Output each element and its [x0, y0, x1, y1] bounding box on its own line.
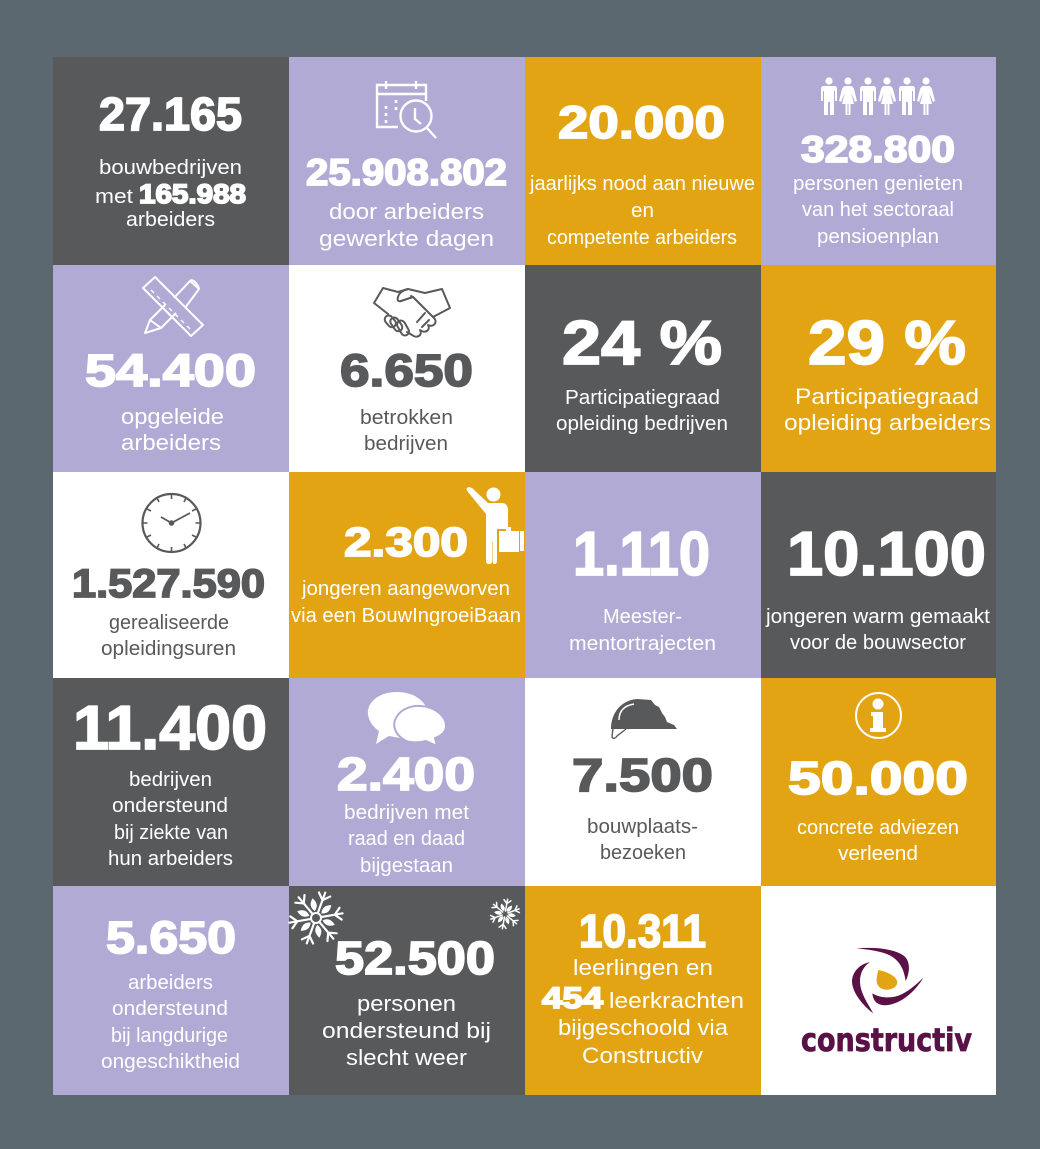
text: betrokken bedrijven: bedrijven — [364, 433, 448, 455]
number: 2.300: 2.300 — [344, 519, 468, 565]
text: door arbeiders gewerkte dagen: gewerkte dagen — [319, 226, 494, 251]
text: bedrijven ondersteund bij ziekte: bedrijven — [129, 769, 212, 791]
panel: 50.000 concrete adviezen — [761, 678, 996, 886]
text: opgeleide arbeiders — [121, 404, 224, 455]
text: meester-mentortrajecten — [569, 606, 716, 655]
number: 5.650: 5.650 — [106, 912, 236, 963]
icon: person with suitcase — [467, 487, 524, 564]
text: arbeiders ondersteund: arbeiders — [128, 972, 213, 994]
text: participatiegraad opleiding arbeiders: Participatiegraad — [795, 384, 979, 409]
text: jongeren warm gemaakt: jongeren warm gemaakt — [765, 606, 990, 628]
panel: 24 % participatiegraad bedrijven — [525, 265, 761, 472]
icon: hard hat — [611, 699, 677, 738]
panel: 1.527.590 opleidingsuren — [53, 472, 289, 678]
text: jongeren warm gemaakt — [765, 606, 990, 654]
text: bedrijven ondersteund bij ziekte — [108, 769, 233, 870]
number: 54.400: 54.400 — [85, 345, 256, 396]
panel: 5.650 langdurige ongeschiktheid — [53, 886, 289, 1095]
text: opgeleide arbeiders: opgeleide — [121, 404, 224, 429]
number: 7.500: 7.500 — [572, 749, 713, 801]
text: leerlingen en 454 leerkrachten: bijgeschoold via — [558, 1015, 729, 1040]
text: jaarlijks nood: competente arbeiders — [547, 227, 737, 249]
text: personen genieten — [793, 173, 963, 248]
text: betrokken bedrijven: betrokken — [360, 407, 453, 429]
text: personen ondersteund bij slecht weer — [322, 991, 491, 1070]
panel: 54.400 opgeleide arbeiders — [53, 265, 289, 472]
text: bouwbedrijven met 165.988 arbeiders — [95, 157, 246, 231]
text: leerlingen en 454 leerkrachten: leerlingen en — [573, 955, 713, 980]
logo wordmark: constructiv: constructiv — [801, 1021, 972, 1059]
panel: 29 % participatiegraad arbeiders — [761, 265, 996, 472]
number: 11.400: 11.400 — [73, 694, 267, 763]
text: participatiegraad opleiding arbeiders — [784, 384, 991, 435]
text: bouwbedrijven met 165.988 arbeiders: bouwbedrijven — [99, 157, 242, 179]
text: personen ondersteund bij slecht weer: personen — [357, 991, 456, 1016]
panel: 2.300 jongeren aangeworven — [289, 472, 525, 678]
text: concrete adviezen verleend: concrete adviezen — [797, 817, 959, 839]
icon: constructiv swirl — [852, 948, 923, 1013]
icon: clock — [142, 494, 200, 552]
text: gerealiseerde opleidingsuren: opleidingsuren — [101, 638, 236, 660]
panel: 328.800 pensioenplan — [761, 57, 996, 265]
panel: 25.908.802 gewerkte dagen — [289, 57, 525, 265]
number: 10.311: 10.311 — [579, 905, 706, 957]
text: leerlingen en 454 leerkrachten: 454 — [542, 982, 603, 1015]
number: 52.500: 52.500 — [335, 932, 495, 984]
text: leerlingen en 454 leerkrachten: Constructiv — [582, 1043, 703, 1068]
text: bedrijven met raad en daad: bijgestaan — [360, 855, 453, 877]
text: personen genieten: pensioenplan — [817, 226, 939, 248]
text: door arbeiders gewerkte dagen — [319, 199, 494, 251]
text: jongeren aangeworven: jongeren aangeworven — [301, 578, 510, 600]
icon: info circle — [856, 693, 901, 738]
panel: 7.500 bouwplaatsbezoeken — [525, 678, 761, 886]
text: bedrijven met raad en daad: raad en daad — [348, 828, 465, 850]
text: bouwplaatsbezoeken — [587, 816, 698, 864]
panel: 11.400 bedrijven ondersteund — [53, 678, 289, 886]
panel: 10.311 leerlingen — [525, 886, 761, 1095]
text: personen ondersteund bij slecht weer: slecht weer — [346, 1045, 467, 1070]
text: arbeiders ondersteund: ondersteund — [112, 998, 228, 1020]
text: meester-mentortrajecten: Meester- — [603, 606, 682, 628]
panel: constructiv logo — [761, 886, 996, 1095]
text: bedrijven ondersteund bij ziekte: hun arbeiders — [108, 848, 233, 870]
number: 1.527.590: 1.527.590 — [72, 562, 265, 606]
icon: speech bubbles — [368, 692, 446, 746]
text: gerealiseerde opleidingsuren — [101, 612, 236, 660]
number: 20.000: 20.000 — [558, 97, 725, 148]
panel: 27.165 bouwbedrijven — [53, 57, 289, 265]
panel: 52.500 slecht weer — [282, 884, 525, 1095]
text: arbeiders ondersteund: bij langdurige — [111, 1025, 228, 1047]
text: jaarlijks nood: jaarlijks nood aan nieuwe — [529, 173, 755, 195]
icon: six people — [821, 77, 935, 115]
text: bedrijven ondersteund bij ziekte: bij ziekte van — [114, 822, 228, 844]
panel: 2.400 raad en daad — [289, 678, 525, 886]
icon: large snowflake — [282, 884, 350, 952]
text: participatiegraad opleiding arbeiders: opleiding arbeiders — [784, 410, 991, 435]
panel: 1.110 meester-mentortrajecten — [525, 472, 761, 678]
text: jongeren aangeworven — [291, 578, 521, 627]
text: bouwplaatsbezoeken: bezoeken — [600, 842, 686, 864]
number: 6.650: 6.650 — [340, 345, 473, 396]
text: door arbeiders gewerkte dagen: door arbeiders — [329, 199, 484, 224]
text: bedrijven met raad en daad — [344, 802, 469, 877]
number: 24 %: 24 % — [562, 309, 722, 378]
text: arbeiders ondersteund: ongeschiktheid — [101, 1051, 240, 1073]
number: 25.908.802: 25.908.802 — [306, 152, 507, 193]
panel: 20.000 arbeiders — [525, 57, 761, 265]
text: meester-mentortrajecten: mentortrajecten — [569, 633, 716, 655]
number: 27.165: 27.165 — [99, 88, 242, 140]
panel: 10.100 jongeren warm gemaakt — [761, 472, 996, 678]
text: jongeren warm gemaakt: voor de bouwsector — [790, 632, 966, 654]
number: 50.000: 50.000 — [788, 752, 968, 804]
text: betrokken bedrijven — [360, 407, 453, 455]
text: participatiegraad opleiding bedrijven: Participatiegraad — [565, 387, 720, 409]
text: jongeren aangeworven: via een BouwIngroeiBaan — [291, 605, 521, 627]
text: personen ondersteund bij slecht weer: ondersteund bij — [322, 1018, 491, 1043]
text: gerealiseerde opleidingsuren: gerealiseerde — [109, 612, 229, 634]
text: personen genieten: van het sectoraal — [802, 199, 954, 221]
text: bouwbedrijven met 165.988 arbeiders: arbeiders — [126, 209, 215, 231]
panel: 6.650 betrokken bedrijven — [289, 265, 525, 472]
text: jaarlijks nood: en — [631, 200, 654, 222]
text: bedrijven met raad en daad: bedrijven met — [344, 802, 469, 824]
text: concrete adviezen verleend — [797, 817, 959, 865]
text: participatiegraad opleiding bedrijven: opleiding bedrijven — [556, 413, 728, 435]
icon: ruler and pencil — [143, 277, 203, 336]
text: jaarlijks nood — [529, 173, 755, 249]
text: personen genieten: personen genieten — [793, 173, 963, 195]
number: 29 %: 29 % — [808, 309, 966, 378]
text: concrete adviezen verleend: verleend — [838, 843, 918, 865]
text: leerlingen en 454 leerkrachten: leerkrachten — [609, 988, 744, 1013]
text: arbeiders ondersteund — [101, 972, 240, 1073]
text: leerlingen en 454 leerkrachten — [542, 955, 744, 1068]
icon: handshake — [374, 288, 450, 337]
number: 1.110: 1.110 — [573, 520, 710, 589]
number: 2.400: 2.400 — [337, 748, 475, 800]
text: bouwbedrijven met 165.988 arbeiders: met — [95, 186, 134, 208]
text: bouwplaatsbezoeken: bouwplaats- — [587, 816, 698, 838]
number: 10.100: 10.100 — [787, 520, 986, 589]
text: opgeleide arbeiders: arbeiders — [121, 430, 221, 455]
icon: calendar with magnifier — [377, 81, 436, 138]
text: participatiegraad opleiding bedrijven — [556, 387, 728, 435]
number: 328.800: 328.800 — [801, 129, 955, 170]
text: bedrijven ondersteund bij ziekte: ondersteund — [112, 795, 228, 817]
text: bouwbedrijven met 165.988 arbeiders: 165.988 — [139, 179, 246, 209]
icon: small snowflake — [488, 897, 522, 931]
